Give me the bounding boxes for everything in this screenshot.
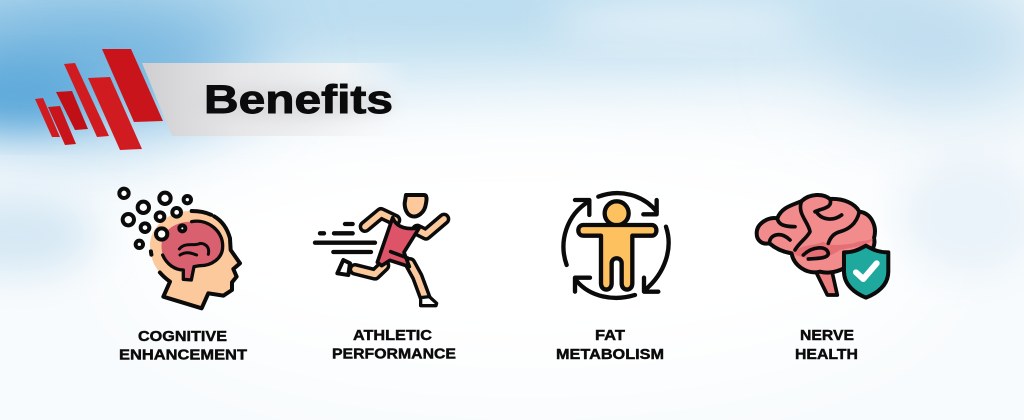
label: nerve health: NERVE [800,328,854,344]
label: nerve health [795,328,858,363]
label: cognitive enhancement [119,329,247,364]
label: cognitive enhancement: COGNITIVE [138,329,227,345]
icon: running athlete [315,195,444,306]
label: athletic performance [332,328,456,363]
logo: red slanted bars [35,49,163,150]
label: cognitive enhancement: ENHANCEMENT [119,348,247,364]
icon: head with brain and bubbles [119,189,240,308]
icon: brain with shield [757,195,888,298]
icon: body with circular arrows [563,193,669,298]
label: fat metabolism [556,328,664,363]
label: fat metabolism: METABOLISM [556,347,664,363]
label: athletic performance: ATHLETIC [353,328,433,344]
heading banner [142,63,410,136]
label: nerve health: HEALTH [795,347,858,363]
label: fat metabolism: FAT [595,328,625,344]
title: Benefits [204,78,393,122]
label: athletic performance: PERFORMANCE [332,347,456,363]
